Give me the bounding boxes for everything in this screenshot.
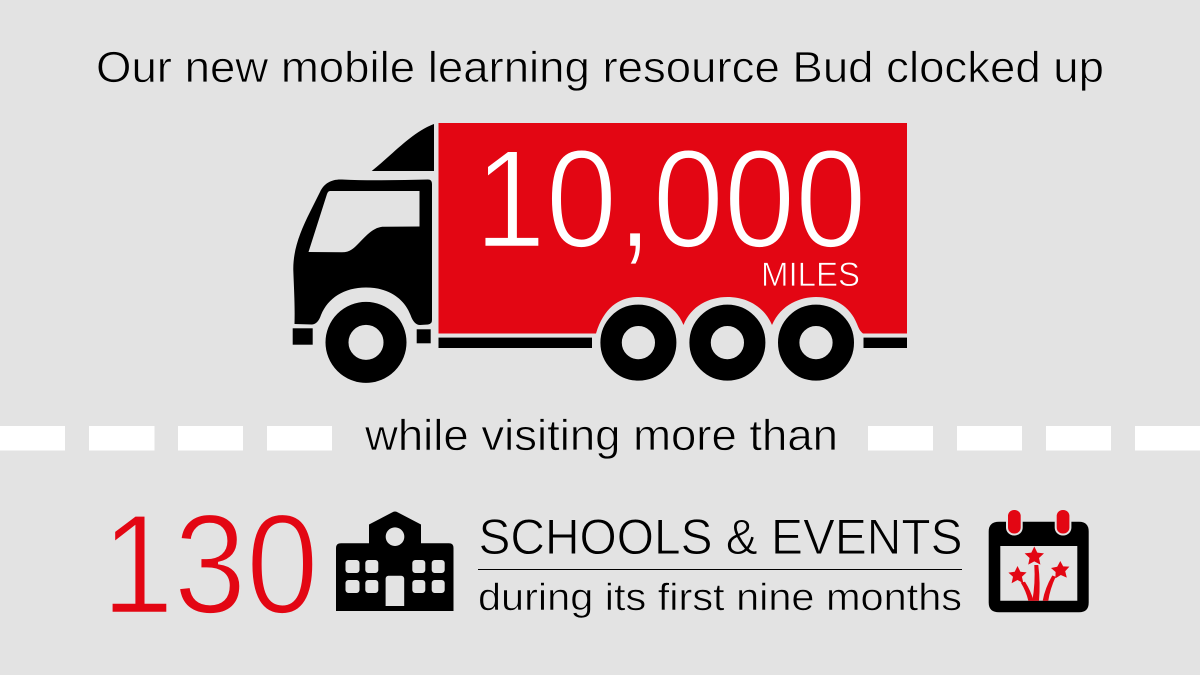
schools and events heading: SCHOOLS & EVENTS <box>478 509 962 565</box>
title: Our new mobile learning resource Bud clocked up <box>96 43 1104 92</box>
rear wheel one <box>611 315 666 370</box>
cab wheel <box>337 313 395 371</box>
mileage number: 10,000 <box>474 120 866 277</box>
rear wheel two <box>700 315 755 370</box>
icon: truck <box>293 123 907 371</box>
rear wheel three <box>789 315 843 370</box>
truck chassis tail <box>864 338 907 348</box>
calendar rings <box>1007 509 1070 534</box>
fireworks <box>1008 546 1069 601</box>
miles label: MILES <box>761 256 860 294</box>
duration text: during its first nine months <box>478 577 962 619</box>
truck step <box>417 329 431 343</box>
divider line <box>478 569 962 570</box>
schools count: 130 <box>102 485 318 644</box>
truck bumper <box>293 328 313 345</box>
truck chassis rear <box>438 338 592 348</box>
connecting text: while visiting more than <box>364 411 838 460</box>
truck cab <box>293 179 432 325</box>
road markings <box>0 426 1200 450</box>
truck roof spoiler <box>372 124 434 171</box>
icon: calendar with fireworks <box>989 509 1089 612</box>
truck cargo box <box>438 123 907 334</box>
icon: school <box>336 512 454 611</box>
calendar body <box>989 522 1089 612</box>
